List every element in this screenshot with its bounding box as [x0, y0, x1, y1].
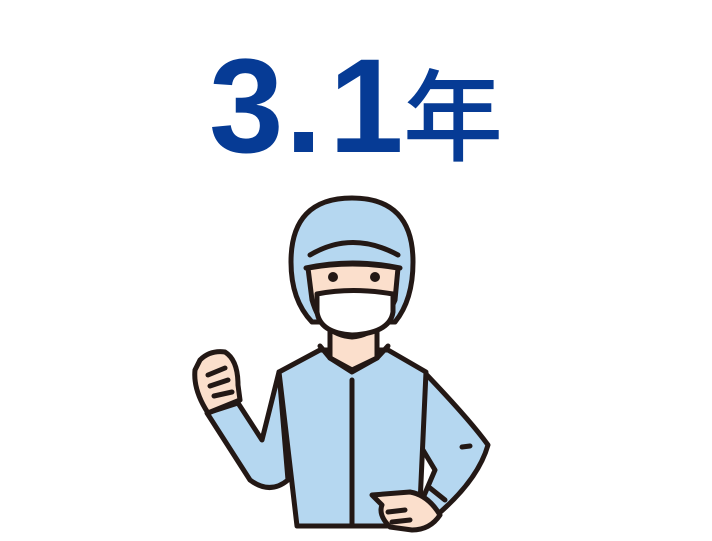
- right hand on hip: [372, 492, 440, 530]
- left raised arm: [195, 352, 288, 488]
- digit 1: 1: [329, 32, 404, 181]
- right arm sleeve: [420, 372, 488, 515]
- mask: [317, 290, 393, 335]
- unit 年: 年: [403, 37, 503, 182]
- dot: .: [285, 32, 322, 181]
- title: 3.1年: [209, 32, 503, 182]
- digit 3: 3: [209, 32, 284, 181]
- hood: [291, 198, 413, 337]
- torso: [279, 330, 426, 526]
- eyes: [328, 272, 380, 282]
